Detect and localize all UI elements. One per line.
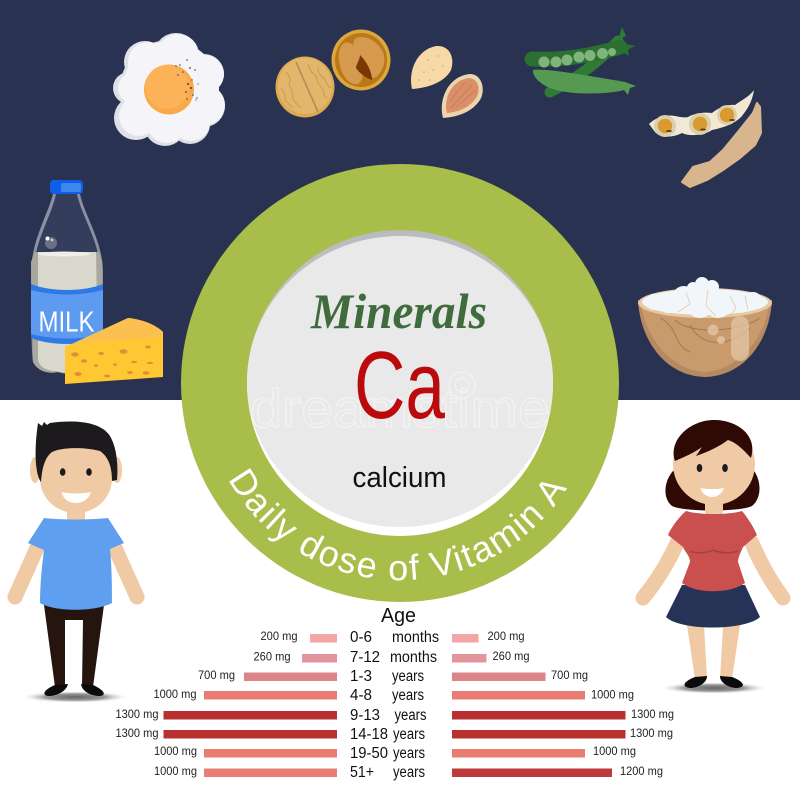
age labels: years	[392, 687, 424, 704]
age labels: months	[392, 629, 439, 646]
male dose labels: 1000 mg	[154, 766, 197, 778]
shadow	[20, 691, 130, 703]
name: calcium: calcium	[352, 462, 446, 494]
icon: whole almond	[411, 46, 452, 89]
neck	[705, 498, 723, 516]
icon: fried egg	[113, 33, 225, 146]
male bars	[164, 634, 337, 777]
blouse	[668, 511, 757, 591]
icon: open soybean pod	[649, 90, 754, 137]
age labels: 4-8	[350, 687, 372, 704]
male dose labels	[116, 631, 298, 778]
navy header band	[0, 0, 800, 400]
female dose labels	[488, 631, 674, 778]
skirt	[666, 585, 760, 628]
green ring	[181, 164, 619, 602]
male dose labels: 700 mg	[198, 670, 235, 682]
female dose labels: 700 mg	[551, 670, 588, 682]
age labels	[350, 629, 439, 781]
female dose labels: 1200 mg	[620, 766, 663, 778]
symbol: Ca: Ca	[354, 332, 445, 439]
age labels: years	[393, 745, 425, 762]
male dose labels: 1300 mg	[116, 728, 158, 740]
figure: boy	[15, 421, 137, 703]
trousers	[44, 605, 104, 687]
arms	[643, 543, 783, 598]
ears	[30, 457, 122, 483]
icon: pea pods	[532, 27, 636, 95]
title: Minerals: Minerals	[310, 283, 487, 339]
age labels: years	[394, 707, 427, 724]
female dose labels: 260 mg	[492, 651, 530, 663]
icon: closed soybean pod	[682, 103, 761, 187]
age labels: years	[393, 726, 425, 743]
neck	[67, 505, 85, 525]
male dose labels: 1000 mg	[154, 746, 197, 758]
face	[673, 423, 755, 505]
female dose labels: 1000 mg	[591, 690, 634, 702]
female dose labels: 1000 mg	[593, 746, 636, 758]
fringe hair	[674, 420, 752, 461]
age labels: years	[392, 668, 424, 685]
smile	[700, 488, 724, 497]
watermark: dreamstime	[250, 379, 550, 439]
shoes	[685, 676, 743, 688]
female dose labels: 1300 mg	[630, 728, 673, 740]
back hair	[665, 468, 760, 510]
age labels: 9-13	[350, 707, 380, 724]
icon: milk bottle	[31, 180, 103, 374]
female bars	[452, 634, 626, 777]
icon: whole walnut	[276, 56, 334, 118]
hair	[36, 421, 117, 482]
curved ring caption: Daily dose of Vitamin A	[229, 468, 568, 581]
icon: shelled almond	[442, 74, 483, 118]
male dose labels: 1300 mg	[116, 709, 158, 721]
arms	[15, 548, 137, 597]
legs	[687, 625, 740, 679]
age table	[116, 605, 674, 781]
age labels: 19-50	[350, 745, 388, 762]
heading: Age: Age	[381, 605, 416, 627]
icon: cheese wedge	[65, 318, 163, 384]
male dose labels: 1000 mg	[154, 689, 196, 701]
figure: girl	[643, 420, 783, 694]
age labels: 1-3	[350, 668, 372, 685]
icon: bowl of cottage cheese	[638, 277, 772, 377]
inner disc	[247, 236, 553, 527]
icon: halved walnut	[332, 30, 390, 90]
eyes	[60, 468, 92, 476]
age labels: 51+	[350, 764, 374, 781]
age labels: months	[390, 649, 437, 666]
age labels: years	[393, 764, 425, 781]
female dose labels: 1300 mg	[631, 709, 674, 721]
male dose labels: 260 mg	[254, 652, 290, 664]
t-shirt	[28, 518, 124, 610]
shadow	[659, 682, 769, 694]
male dose labels: 200 mg	[260, 631, 298, 643]
shoes	[44, 684, 104, 696]
female dose labels: 200 mg	[488, 631, 524, 643]
eyes	[697, 464, 728, 472]
age labels: 14-18	[350, 726, 388, 743]
age labels: 0-6	[350, 629, 372, 646]
icon: milk bottle: MILK	[38, 306, 95, 338]
face	[40, 442, 112, 513]
inner disc rim	[247, 230, 553, 536]
central badge	[181, 164, 619, 602]
smile	[62, 492, 91, 503]
age labels: 7-12	[350, 649, 380, 666]
